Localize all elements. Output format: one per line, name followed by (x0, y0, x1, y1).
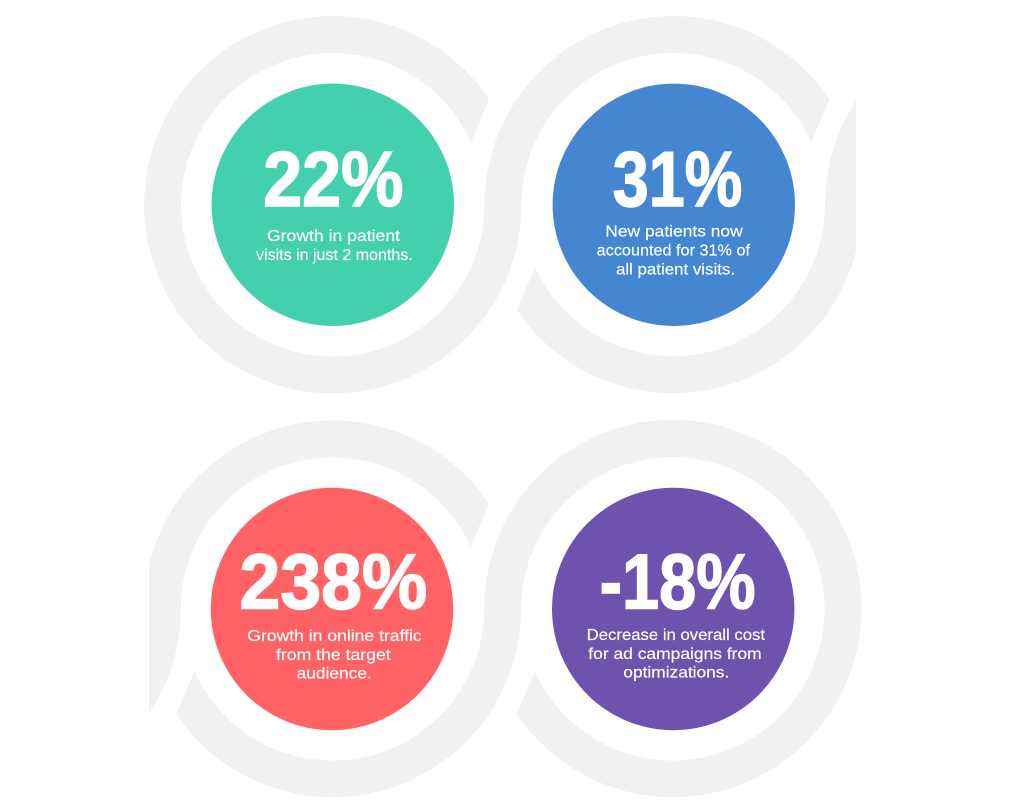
red circle (211, 488, 453, 730)
panel: 31% new patients (553, 84, 795, 326)
description: new patients share: all patient visits. (616, 261, 735, 278)
description: ad cost decrease: optimizations. (623, 665, 729, 682)
description: new patients share: New patients now (605, 224, 743, 241)
panel: 22% growth in patient visits (212, 84, 454, 326)
description: new patients share: accounted for 31% of (597, 242, 751, 259)
description: ad cost decrease (587, 627, 766, 682)
description: online traffic growth: Growth in online traffic (247, 628, 422, 645)
green circle (212, 84, 454, 326)
description: growth in patient visits (256, 228, 413, 264)
description: growth in patient visits: visits in just 2 months. (256, 247, 413, 264)
blue circle (553, 84, 795, 326)
panel: 238% growth in online traffic (211, 488, 453, 730)
stat: 238%: 238% (240, 538, 427, 626)
stat: 31%: 31% (613, 135, 742, 223)
stat: 22%: 22% (263, 135, 404, 223)
background: interlocking grey rings, top row (144, 16, 875, 393)
description: online traffic growth: from the target (276, 647, 391, 664)
description: growth in patient visits: Growth in patient (267, 228, 401, 245)
background: interlocking grey rings, bottom row (130, 420, 862, 797)
panel: -18% decrease in ad cost (552, 488, 794, 730)
purple circle (552, 488, 794, 730)
description: online traffic growth (247, 628, 422, 683)
description: new patients share (597, 224, 751, 278)
description: ad cost decrease: Decrease in overall cost (587, 627, 766, 644)
description: online traffic growth: audience. (297, 666, 372, 683)
description: ad cost decrease: for ad campaigns from (588, 646, 762, 663)
stat: -18%: -18% (600, 538, 756, 626)
